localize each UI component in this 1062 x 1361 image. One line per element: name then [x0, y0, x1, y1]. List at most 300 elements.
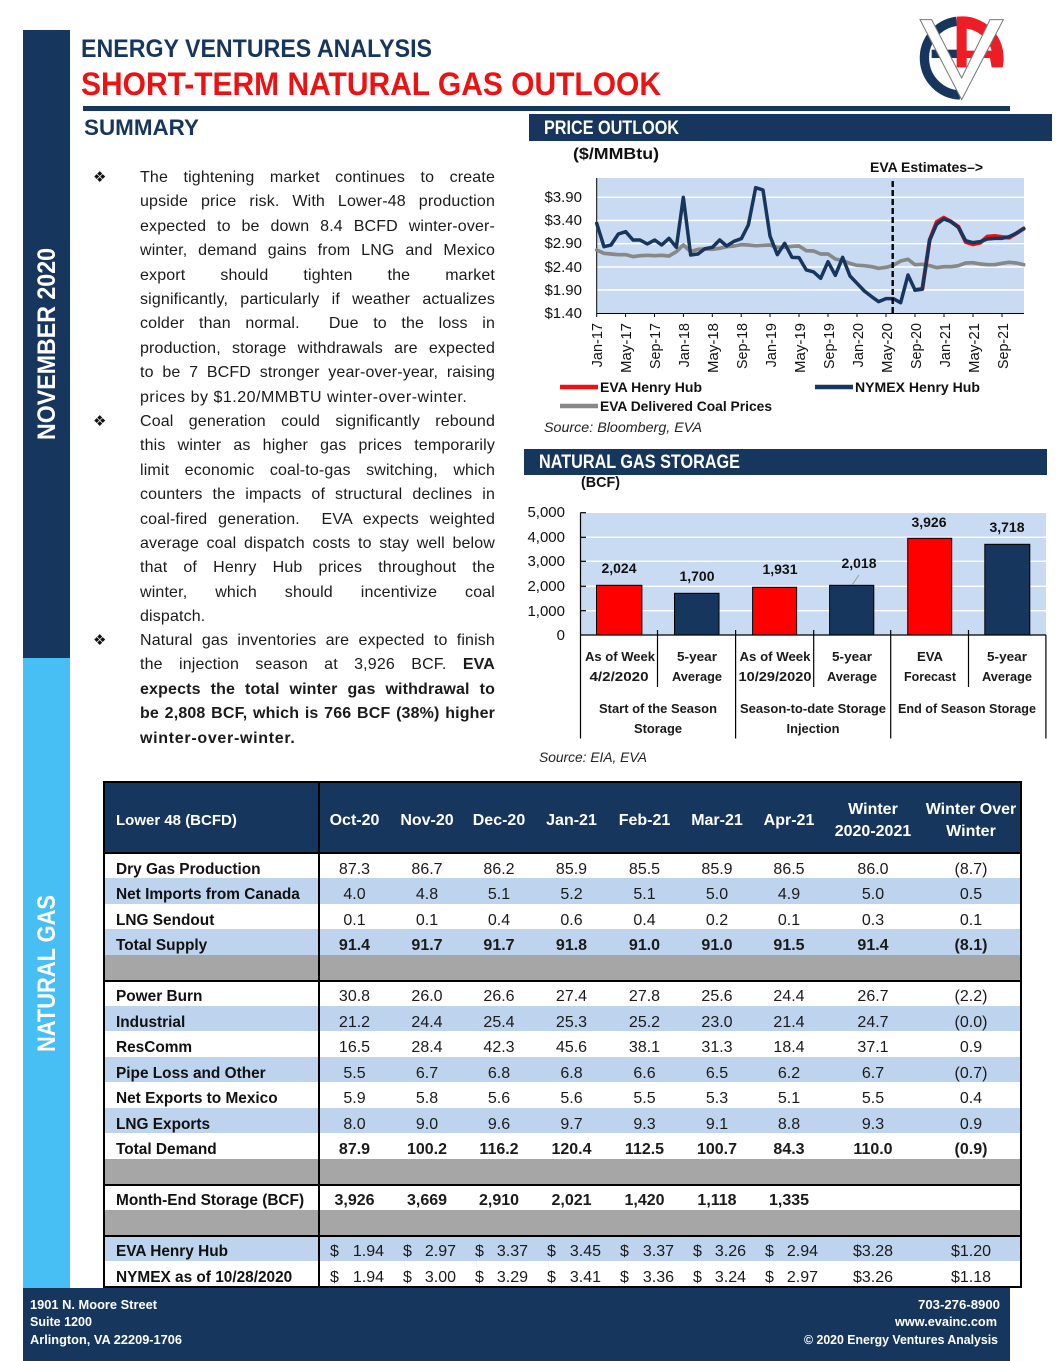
bar value labels: 1,700 [679, 568, 715, 584]
bullet marker 1: ❖ [93, 168, 106, 186]
bullet 1 text: upside price risk. With Lower-48 production [140, 193, 495, 210]
row: NYMEX: $ [620, 1269, 629, 1286]
chart legend: price outlook: NYMEX Henry Hub [855, 380, 980, 395]
bullet 1 text: colder than normal. Due to the loss in [140, 315, 495, 332]
chart legend: price outlook [560, 380, 980, 414]
table header row: Nov-20 [400, 812, 454, 829]
panel header: price outlook [529, 114, 1052, 141]
row: net exports to Mexico [116, 1090, 982, 1107]
x-axis labels: months: May-20 [880, 323, 896, 373]
row: NYMEX: 3.29 [497, 1269, 528, 1286]
row: total supply: 91.0 [701, 937, 733, 954]
y-axis labels: price: $1.40 [544, 305, 582, 322]
bullet 1 text: winter, demand gains from LNG and Mexico [140, 242, 495, 259]
row: EVA Henry Hub: $1.20 [951, 1243, 991, 1260]
line chart: price outlook [544, 178, 1024, 373]
chart unit label: (BCF) [581, 474, 620, 491]
row: total demand: (0.9) [955, 1141, 987, 1158]
bullet 1 text: The tightening market continues to create [140, 169, 495, 186]
row: net imports from Canada: 5.0 [862, 886, 884, 903]
row: dry gas production [116, 860, 987, 878]
row: total demand: 120.4 [551, 1141, 592, 1158]
row: pipe loss and other: (0.7) [955, 1064, 987, 1082]
row: pipe loss and other: 6.2 [778, 1064, 800, 1082]
bullet 1 text: expected to be down 8.4 BCFD winter-over- [140, 218, 495, 235]
bullet 2 text: limit economic coal-to-gas switching, which [140, 462, 495, 479]
x-axis labels: months: Jan-20 [851, 323, 867, 367]
footer address [30, 1297, 182, 1347]
row: dry gas production: (8.7) [955, 860, 987, 878]
header rule [83, 106, 1010, 111]
row: rescomm: 18.4 [773, 1039, 805, 1056]
row: power burn: (2.2) [955, 988, 987, 1005]
row: LNG sendout: 0.1 [960, 912, 982, 928]
row: power burn: 26.7 [857, 988, 889, 1005]
bar value labels: 3,718 [989, 519, 1025, 535]
row: EVA Henry Hub: 3.26 [715, 1243, 746, 1260]
x-axis labels: months: Sep-18 [735, 323, 751, 369]
row: total demand [116, 1141, 987, 1158]
row: EVA Henry Hub: $ [620, 1243, 629, 1260]
y-axis labels: storage [527, 504, 565, 644]
bullet 3 text: Natural gas inventories are expected to finish [140, 632, 495, 649]
row: NYMEX: 1.94 [353, 1269, 384, 1286]
row: LNG sendout: 0.6 [560, 912, 583, 928]
row: total supply: 91.7 [483, 937, 515, 954]
row: EVA Henry Hub: 2.94 [787, 1243, 818, 1260]
chart unit label: ($/MMBtu) [573, 146, 659, 163]
row: total supply: 91.4 [339, 937, 370, 954]
table header row: 2020-2021 [835, 823, 911, 840]
bullet 3 text: winter-over-winter. [140, 730, 296, 747]
bullet marker 3: ❖ [93, 631, 106, 649]
y-axis labels: storage: 3,000 [527, 553, 565, 570]
x-axis labels: months: Jan-18 [677, 323, 693, 367]
row: power burn [116, 988, 987, 1005]
row: month-end storage: 1,118 [697, 1192, 737, 1209]
row: month-end storage: Month-End Storage (BCF) [116, 1192, 304, 1209]
x-axis labels: months: Sep-20 [909, 323, 925, 369]
table header row [105, 783, 1020, 1286]
bullet 1 text [140, 169, 495, 406]
row: pipe loss and other: 6.7 [416, 1064, 438, 1082]
x-axis labels: months: May-17 [619, 323, 635, 373]
source: storage chart: Source: EIA, EVA [539, 749, 647, 765]
row: total demand: 87.9 [339, 1141, 370, 1158]
text block: summary bullets [93, 168, 495, 747]
bar value labels [601, 514, 1025, 584]
row: net exports to Mexico: 5.8 [416, 1090, 438, 1107]
y-axis labels: price: $3.90 [544, 189, 582, 206]
row: rescomm: 28.4 [411, 1039, 443, 1056]
footer address: 1901 N. Moore Street [30, 1297, 158, 1312]
table header row: Mar-21 [691, 812, 743, 829]
category labels: 4/2/2020 [590, 669, 648, 684]
row: dry gas production: 87.3 [339, 860, 370, 878]
row: total demand: 100.2 [407, 1141, 447, 1158]
y-axis labels: storage: 2,000 [527, 578, 565, 595]
bullet 3 text [140, 632, 495, 747]
row: net imports from Canada: 5.1 [488, 886, 510, 903]
row: NYMEX: $3.26 [853, 1269, 893, 1286]
side band: Natural Gas [23, 658, 70, 1288]
heading: summary: SUMMARY [84, 115, 199, 140]
bullet 3 text: be 2,808 BCF, which is 766 BCF (38%) higher [140, 705, 495, 722]
bullet 3 text: expects the total winter gas withdrawal to [140, 681, 495, 698]
table header row: Apr-21 [764, 812, 814, 829]
row: total supply [105, 929, 1020, 955]
y-axis labels: price: $3.40 [544, 212, 582, 229]
y-axis labels: storage: 1,000 [527, 603, 565, 620]
row: net exports to Mexico: 5.1 [778, 1090, 800, 1107]
row: total supply: 91.8 [556, 937, 587, 954]
row: net imports from Canada: 5.1 [633, 886, 656, 903]
title: SHORT-TERM NATURAL GAS OUTLOOK [81, 66, 661, 102]
row: industrial: 21.2 [339, 1014, 370, 1030]
bullet 1 text: production, storage withdrawals are expected [140, 340, 495, 357]
row: power burn: 24.4 [773, 988, 805, 1005]
heading: company name: ENERGY VENTURES ANALYSIS [81, 35, 432, 63]
chart annotation: EVA estimates: EVA Estimates–> [870, 160, 983, 175]
x-axis labels: months: Sep-19 [822, 323, 838, 369]
row: pipe loss and other: 6.7 [862, 1064, 884, 1082]
row: net exports to Mexico: Net Exports to Mexico [116, 1090, 278, 1107]
row: total demand: Total Demand [116, 1141, 217, 1158]
row: net imports from Canada: 4.0 [343, 886, 366, 903]
category labels: EVA [917, 649, 944, 664]
chart legend: price outlook: EVA Delivered Coal Prices [600, 399, 772, 414]
row: month-end storage: 3,926 [334, 1192, 375, 1209]
row: rescomm: 37.1 [857, 1039, 889, 1056]
y-axis labels: storage: 4,000 [527, 529, 565, 546]
row: LNG exports [105, 1108, 1020, 1133]
y-axis labels: price: $2.90 [544, 235, 582, 252]
x-axis labels: months: May-18 [706, 323, 722, 373]
row: EVA Henry Hub: $ [475, 1243, 484, 1260]
row: NYMEX: NYMEX as of 10/28/2020 [116, 1269, 292, 1286]
row: industrial: 24.4 [411, 1014, 443, 1030]
row: rescomm [116, 1039, 982, 1056]
source: price chart: Source: Bloomberg, EVA [544, 419, 702, 435]
row: rescomm: 0.9 [960, 1039, 982, 1056]
table header row: Oct-20 [330, 812, 379, 829]
category labels: As of Week [585, 649, 656, 664]
row: total supply: Total Supply [116, 937, 207, 954]
footer address: Arlington, VA 22209-1706 [30, 1332, 182, 1347]
row: LNG exports: 9.3 [633, 1116, 656, 1132]
bullet 2 text: dispatch. [140, 608, 205, 625]
row: LNG exports: 9.1 [706, 1116, 728, 1132]
bullet 2 text [140, 413, 495, 625]
row: rescomm: 42.3 [483, 1039, 515, 1056]
row: power burn: 26.0 [411, 988, 443, 1005]
icon: EVA logo [920, 16, 1004, 100]
row: net imports from Canada: 4.8 [416, 886, 438, 903]
row: EVA Henry Hub [105, 1237, 1020, 1261]
row: total supply: 91.4 [857, 937, 889, 954]
row: EVA Henry Hub: $ [765, 1243, 774, 1260]
row: net exports to Mexico: 5.3 [706, 1090, 728, 1107]
row: pipe loss and other: 6.8 [488, 1064, 510, 1082]
bullet 2 text: coal-fired generation. EVA expects weighted [140, 511, 495, 528]
bullet 2 text: winter, which should incentivize coal [140, 584, 495, 601]
row: LNG exports: 9.0 [416, 1116, 438, 1132]
row: total demand: 112.5 [625, 1141, 664, 1158]
row: LNG sendout: 0.3 [862, 912, 884, 928]
bullet 2 text: average coal dispatch costs to stay well below [140, 535, 495, 552]
row: net exports to Mexico: 5.9 [343, 1090, 366, 1107]
row: dry gas production: 85.9 [556, 860, 587, 878]
spacer row [105, 955, 1020, 980]
row: power burn: 26.6 [483, 988, 515, 1005]
row: EVA Henry Hub: 3.45 [570, 1243, 601, 1260]
row: EVA Henry Hub: $ [547, 1243, 556, 1260]
row: NYMEX: 3.24 [715, 1269, 746, 1286]
row: EVA Henry Hub: 3.37 [643, 1243, 674, 1260]
row: LNG exports: 8.0 [343, 1116, 366, 1132]
row: NYMEX: 3.41 [570, 1269, 601, 1286]
row: total demand: 110.0 [853, 1141, 893, 1158]
category labels: Season-to-date Storage [740, 701, 886, 716]
side band: November 2020 [23, 30, 70, 658]
row: month-end storage: 1,420 [624, 1192, 665, 1209]
row: net exports to Mexico: 5.5 [862, 1090, 884, 1107]
row: net exports to Mexico: 5.5 [633, 1090, 656, 1107]
row: NYMEX: $ [693, 1269, 702, 1286]
row: total supply: 91.5 [773, 937, 805, 954]
row: rescomm: 38.1 [629, 1039, 660, 1056]
row: industrial: 25.3 [556, 1014, 587, 1030]
category labels: Average [672, 669, 722, 684]
row: LNG exports: 9.7 [560, 1116, 583, 1132]
row: dry gas production: Dry Gas Production [116, 860, 261, 878]
row: net exports to Mexico: 5.6 [488, 1090, 510, 1107]
row: LNG exports: 0.9 [960, 1116, 982, 1132]
row: LNG sendout: 0.1 [343, 912, 366, 928]
table header row: Lower 48 (BCFD) [116, 812, 237, 829]
category labels: Injection [786, 721, 840, 736]
row: NYMEX: $ [547, 1269, 556, 1286]
table header row: Winter Over [926, 801, 1016, 818]
row: LNG sendout: 0.1 [416, 912, 438, 928]
category labels: End of Season Storage [898, 701, 1036, 716]
row: EVA Henry Hub: 3.37 [497, 1243, 528, 1260]
row: pipe loss and other: 6.5 [706, 1064, 728, 1082]
row: dry gas production: 86.2 [483, 860, 515, 878]
table header row: Feb-21 [619, 812, 670, 829]
panel header: price outlook: PRICE OUTLOOK [544, 118, 679, 139]
row: NYMEX: 3.00 [425, 1269, 456, 1286]
row: total demand: 116.2 [479, 1141, 519, 1158]
bar value labels: 1,931 [762, 561, 798, 577]
row: LNG sendout: LNG Sendout [116, 912, 214, 928]
row: EVA Henry Hub: $ [403, 1243, 412, 1260]
row: EVA Henry Hub: $3.28 [853, 1243, 893, 1260]
bar chart: natural gas storage [527, 504, 1046, 738]
spacer row [105, 1210, 1020, 1235]
table header row: Winter [848, 801, 898, 818]
row: pipe loss and other: 5.5 [343, 1064, 366, 1082]
category labels: As of Week [740, 649, 811, 664]
x-axis labels: months: May-19 [793, 323, 809, 373]
row: LNG sendout: 0.1 [778, 912, 800, 928]
bullet 2 text: counters the impacts of structural declines in [140, 486, 495, 503]
row: pipe loss and other [105, 1057, 1020, 1082]
row: pipe loss and other: 6.8 [560, 1064, 583, 1082]
row: power burn: 30.8 [339, 988, 370, 1005]
footer contact: www.evainc.com [894, 1314, 997, 1329]
x-axis labels: months: Jan-17 [590, 323, 606, 367]
row: rescomm: 31.3 [701, 1039, 733, 1056]
row: LNG exports: 8.8 [778, 1116, 800, 1132]
category labels [585, 649, 1036, 736]
row: month-end storage: 2,910 [479, 1192, 519, 1209]
row: LNG exports: 9.6 [488, 1116, 510, 1132]
row: rescomm: 45.6 [556, 1039, 587, 1056]
row: industrial: (0.0) [955, 1014, 987, 1030]
y-axis labels: storage: 0 [557, 627, 565, 644]
table header row: Dec-20 [473, 812, 525, 829]
row: LNG sendout [116, 912, 982, 928]
row: net imports from Canada: 4.9 [778, 886, 800, 903]
row: rescomm: ResComm [116, 1039, 192, 1056]
category labels: Average [827, 669, 877, 684]
row: industrial: Industrial [116, 1014, 185, 1030]
side band: November 2020: NOVEMBER 2020 [33, 248, 61, 440]
row: total supply: 91.0 [629, 937, 660, 954]
row: dry gas production: 86.7 [411, 860, 443, 878]
category labels: Start of the Season [599, 701, 717, 716]
row: total supply: 91.7 [411, 937, 443, 954]
footer contact: © 2020 Energy Ventures Analysis [804, 1332, 998, 1347]
row: LNG exports: LNG Exports [116, 1116, 210, 1132]
bullet 1 text: export should tighten the market [140, 267, 495, 284]
x-axis labels: months: Sep-17 [648, 323, 664, 369]
row: industrial: 21.4 [773, 1014, 805, 1030]
panel header: natural gas storage [524, 449, 1047, 475]
row: industrial: 24.7 [857, 1014, 889, 1030]
bullet 2 text: that of Henry Hub prices throughout the [140, 559, 495, 576]
row: EVA Henry Hub: $ [330, 1243, 339, 1260]
category labels: 5-year [987, 649, 1027, 664]
footer contact [804, 1297, 1000, 1347]
category labels: 5-year [832, 649, 872, 664]
bar value labels: 3,926 [911, 514, 947, 530]
row: dry gas production: 86.5 [773, 860, 805, 878]
row: rescomm: 16.5 [339, 1039, 370, 1056]
row: net imports from Canada: 0.5 [960, 886, 982, 903]
category labels: Average [982, 669, 1032, 684]
row: month-end storage: 2,021 [551, 1192, 592, 1209]
row: NYMEX: 3.36 [643, 1269, 674, 1286]
table header row: Winter [946, 823, 996, 840]
row: total demand: 84.3 [773, 1141, 805, 1158]
row: industrial: 25.4 [483, 1014, 515, 1030]
row: EVA Henry Hub: 1.94 [353, 1243, 384, 1260]
axes and category separators [580, 512, 1046, 738]
row: power burn: 27.8 [629, 988, 660, 1005]
bullet 3 text: the injection season at 3,926 BCF. EVA [140, 656, 495, 673]
spacer row [105, 1159, 1020, 1184]
row: dry gas production: 85.5 [629, 860, 660, 878]
category labels: Forecast [904, 669, 957, 684]
bar value labels: 2,024 [601, 560, 637, 576]
bullet 2 text: Coal generation could significantly rebound [140, 413, 495, 430]
bullet 1 text: to be 7 BCFD stronger year-over-year, raising [140, 364, 495, 381]
row: dry gas production: 85.9 [701, 860, 733, 878]
footer [23, 1288, 1010, 1361]
row: month-end storage [116, 1192, 809, 1209]
row: industrial: 23.0 [701, 1014, 733, 1030]
row: net exports to Mexico: 0.4 [960, 1090, 982, 1107]
row: NYMEX: $ [475, 1269, 484, 1286]
bars [596, 538, 1030, 635]
row: EVA Henry Hub: $ [693, 1243, 702, 1260]
x-axis labels: months: Jan-19 [764, 323, 780, 367]
row: net imports from Canada: 5.0 [706, 886, 728, 903]
bar value labels: 2,018 [841, 555, 877, 571]
category labels: 5-year [677, 649, 717, 664]
bullet 2 text: this winter as higher gas prices temporarily [140, 437, 495, 454]
row: power burn: Power Burn [116, 988, 202, 1005]
y-axis labels: price [544, 189, 582, 322]
table header row: Jan-21 [546, 812, 597, 829]
row: net imports from Canada [105, 878, 1020, 904]
row: NYMEX: $ [765, 1269, 774, 1286]
row: LNG sendout: 0.4 [488, 912, 510, 928]
row: month-end storage: 1,335 [769, 1192, 809, 1209]
row: LNG exports: 9.3 [862, 1116, 884, 1132]
row: NYMEX: 2.97 [787, 1269, 818, 1286]
data table: Lower 48 balance [103, 781, 1022, 1288]
row: NYMEX [116, 1269, 991, 1286]
footer address: Suite 1200 [30, 1314, 92, 1329]
row: power burn: 27.4 [556, 988, 587, 1005]
x-axis labels: months: Jan-21 [938, 323, 954, 367]
side band: Natural Gas: NATURAL GAS [33, 895, 61, 1052]
panel header: natural gas storage: NATURAL GAS STORAGE [539, 452, 740, 473]
x-axis labels: months: Sep-21 [996, 323, 1012, 369]
y-axis labels: price: $1.90 [544, 282, 582, 299]
row: LNG sendout: 0.4 [633, 912, 656, 928]
row: NYMEX: $1.18 [951, 1269, 991, 1286]
row: EVA Henry Hub: 2.97 [425, 1243, 456, 1260]
bullet 1 text: significantly, particularly if weather actualizes [140, 291, 495, 308]
row: dry gas production: 86.0 [857, 860, 889, 878]
category labels: 10/29/2020 [738, 669, 812, 684]
bullet marker 2: ❖ [93, 412, 106, 430]
row: EVA Henry Hub: EVA Henry Hub [116, 1243, 228, 1260]
bullet 1 text: prices by $1.20/MMBTU winter-over-winter. [140, 389, 467, 406]
footer contact: 703-276-8900 [918, 1297, 1000, 1312]
row: total supply: (8.1) [955, 937, 987, 954]
row: net exports to Mexico: 5.6 [560, 1090, 583, 1107]
x-axis labels: months [590, 323, 1012, 373]
row: power burn: 25.6 [701, 988, 733, 1005]
y-axis labels: price: $2.40 [544, 259, 582, 276]
row: total demand: 100.7 [697, 1141, 737, 1158]
row: LNG sendout: 0.2 [706, 912, 728, 928]
row: net imports from Canada: Net Imports from Canada [116, 886, 300, 903]
category labels: Storage [634, 721, 682, 736]
row: industrial: 25.2 [629, 1014, 660, 1030]
chart legend: price outlook: EVA Henry Hub [600, 380, 702, 395]
x-axis labels: months: May-21 [967, 323, 983, 373]
row: pipe loss and other: 6.6 [633, 1064, 656, 1082]
row: NYMEX: $ [403, 1269, 412, 1286]
row: industrial [105, 1006, 1020, 1031]
row: month-end storage: 3,669 [407, 1192, 447, 1209]
